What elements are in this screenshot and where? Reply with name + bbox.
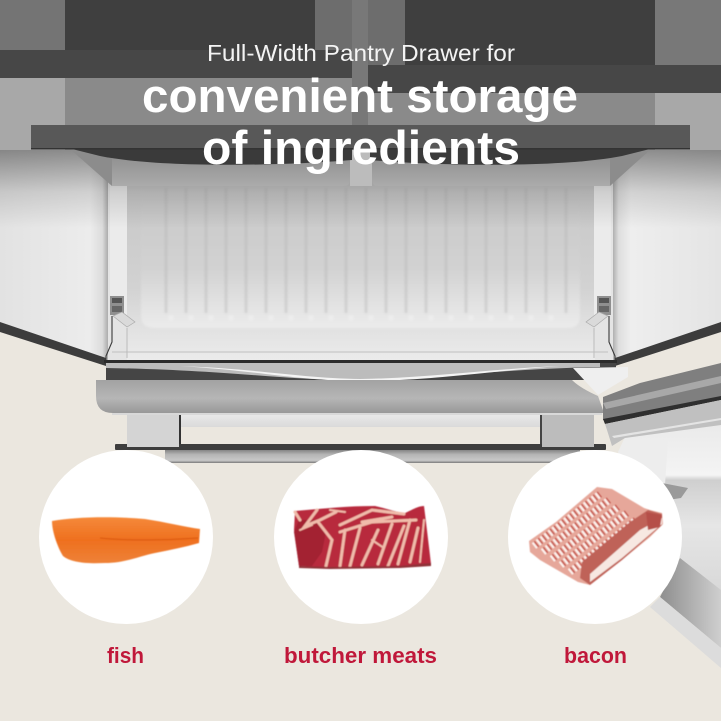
right open door [611, 130, 721, 366]
door gasket [603, 363, 721, 420]
headline: convenient storage [142, 69, 578, 122]
door hinge [662, 483, 688, 500]
drawer side rails and clips [106, 296, 615, 362]
drawer interior [108, 150, 613, 363]
drawer handle front [96, 380, 604, 415]
door light panel [625, 425, 721, 592]
left open door [0, 130, 110, 366]
intro line: Full-Width Pantry Drawer for [207, 40, 515, 66]
drawer front lip [104, 360, 617, 381]
label: fish: fish [107, 643, 144, 668]
icon: pork cut [294, 506, 431, 569]
door shelf light strip [650, 597, 721, 668]
drawer ribs [166, 188, 566, 313]
drawer rib highlights [168, 315, 554, 321]
door shelf dark panel [660, 558, 721, 648]
top shade over walls [0, 148, 721, 228]
food item: fish [39, 450, 213, 624]
top shelves with dark overlay [0, 0, 721, 186]
food item: butcher meats [274, 450, 448, 624]
icon: salmon fillet [52, 517, 200, 563]
headline [142, 69, 578, 174]
clear bins [112, 150, 350, 186]
food item: bacon [508, 450, 682, 624]
right hinge bracket [573, 367, 628, 395]
bacon circle [508, 450, 682, 624]
lower right door [603, 363, 721, 668]
label: butcher meats: butcher meats [284, 643, 437, 668]
handle posts and bar [115, 415, 606, 463]
fish circle [39, 450, 213, 624]
headline: of ingredients [202, 121, 520, 174]
label: bacon: bacon [564, 643, 627, 668]
icon: bacon slices [529, 487, 663, 585]
meat circle [274, 450, 448, 624]
